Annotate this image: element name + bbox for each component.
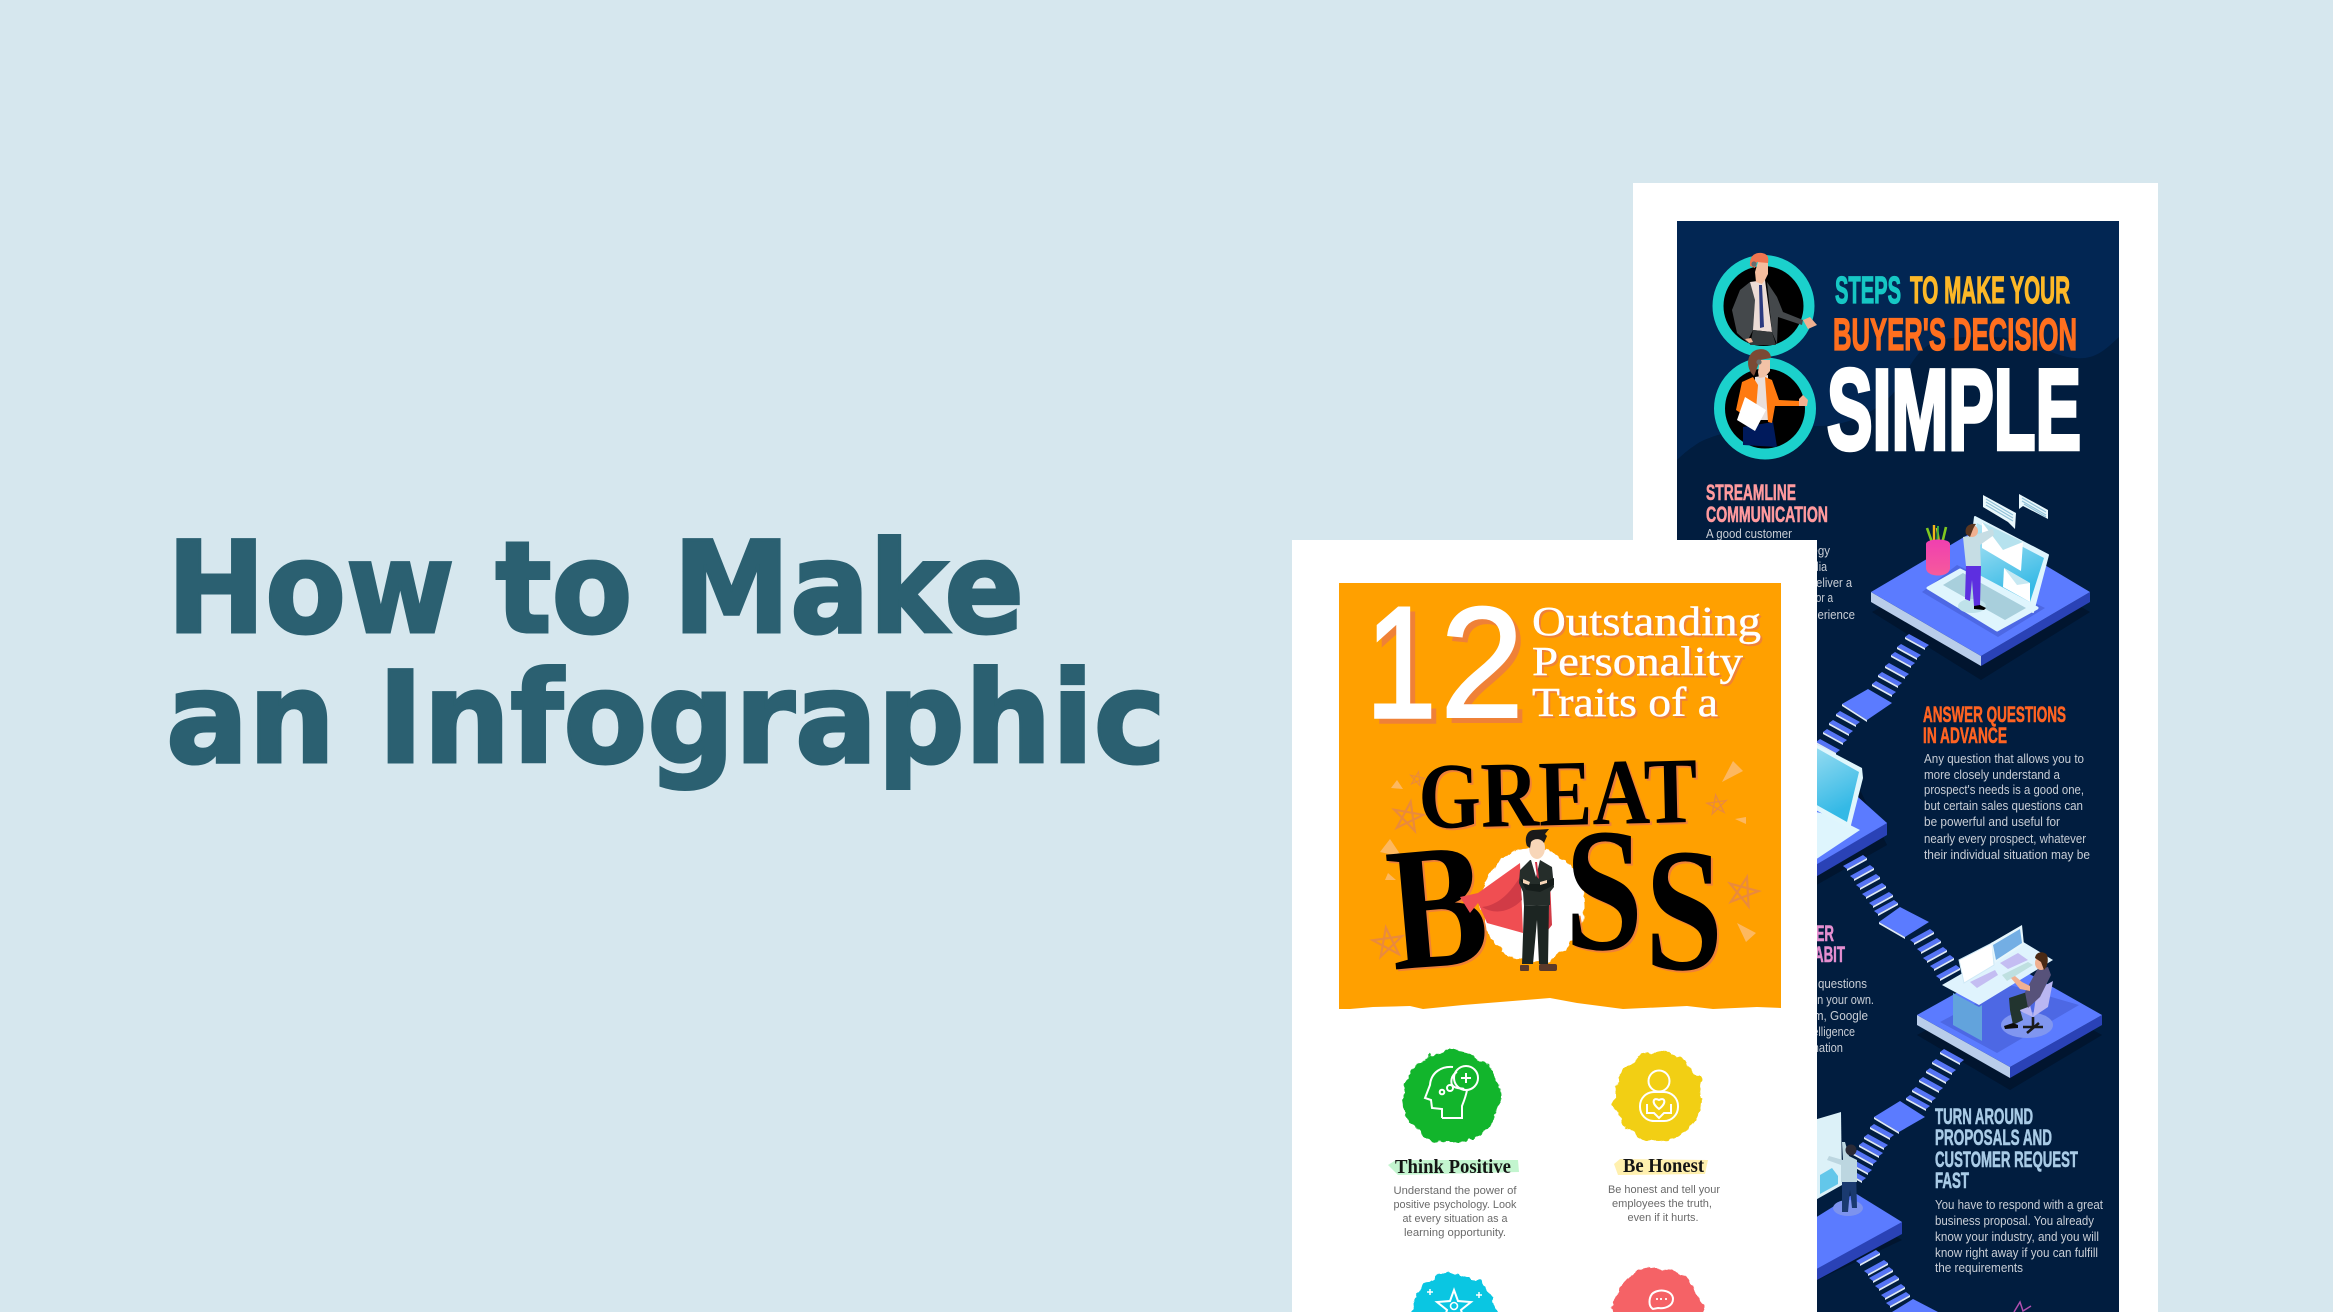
decorative stars and triangles xyxy=(1371,761,1761,957)
heading: outstanding personality traits of a: Outstanding xyxy=(1534,600,1763,646)
step 3 text: partially hidden research habit: BETTER xyxy=(1781,921,1834,946)
white torn splash behind boss xyxy=(1481,848,1585,962)
heading line: steps to make your: TO MAKE YOUR xyxy=(1910,270,2070,312)
step 4 text: turn around proposals: FAST xyxy=(1935,1168,1969,1193)
stairs: platform two to three xyxy=(1843,855,1960,981)
stairs: platform four onward xyxy=(1856,1250,1938,1312)
step 4 text: turn around proposals: TURN AROUND xyxy=(1935,1104,2033,1129)
step 2 text: answer questions in advance: prospect's needs is a good one, xyxy=(1924,783,2084,797)
icon: yellow blob with person and heart xyxy=(1614,1051,1702,1141)
step 3 text: partially hidden research habit: from, Google xyxy=(1800,1009,1868,1023)
step 2 text: answer questions in advance: but certain sales questions can xyxy=(1924,799,2083,813)
step 3 text: partially hidden research habit: RESEARCH HABIT xyxy=(1726,942,1845,967)
step 3 text: partially hidden research habit: questions xyxy=(1818,977,1867,991)
heading word: boss: S xyxy=(1645,813,1723,1008)
heading word: great: GREAT xyxy=(1419,741,1701,851)
heading: outstanding personality traits of a: Outstanding xyxy=(1532,598,1761,644)
heading word: simple: SIMPLE xyxy=(1827,347,2081,474)
step 1 text: streamline communication: A good customer xyxy=(1706,527,1792,541)
title: an Infographic xyxy=(166,644,1166,792)
step 3 text: partially hidden research habit xyxy=(1726,921,1874,1055)
icon: red blob with speech bubble xyxy=(1612,1267,1702,1312)
panel: front infographic card xyxy=(1292,540,1817,1312)
step 4 text: turn around proposals: the requirements xyxy=(1935,1261,2023,1275)
label highlight xyxy=(1614,1159,1708,1175)
trait: think positive xyxy=(1388,1051,1519,1239)
heading line: buyer's decision: BUYER'S DECISION xyxy=(1833,309,2077,360)
trait: be honest xyxy=(1608,1051,1720,1224)
step 2 text: answer questions in advance: IN ADVANCE xyxy=(1923,723,2007,748)
title xyxy=(166,514,1166,792)
heading: outstanding personality traits of a: Personality xyxy=(1534,640,1746,686)
step 3 text: partially hidden research habit: on your own. xyxy=(1811,993,1874,1007)
step 1 text: streamline communication: STREAMLINE xyxy=(1706,480,1796,505)
heading word: boss: S xyxy=(1567,795,1645,990)
step 3 text: partially hidden research habit: information xyxy=(1788,1041,1843,1055)
icon: man in teal ring xyxy=(1718,253,1817,352)
illustration: laptop platform xyxy=(1871,494,2090,680)
heading: outstanding personality traits of a xyxy=(1532,598,1763,727)
big number 12: 2 xyxy=(1445,580,1529,756)
step 4 text: turn around proposals: PROPOSALS AND xyxy=(1935,1125,2052,1150)
icon: pink doodle star at page cut xyxy=(2014,1302,2031,1312)
big number 12 xyxy=(1366,575,1529,756)
step 4 text: turn around proposals: know your industry, and you will xyxy=(1935,1230,2099,1244)
description: at every situation as a xyxy=(1402,1213,1508,1225)
description xyxy=(1394,1185,1517,1239)
description: employees the truth, xyxy=(1612,1198,1712,1210)
panel: back infographic card xyxy=(1633,183,2158,1312)
title: How to Make xyxy=(167,514,1024,662)
navy poster background xyxy=(1677,221,2119,1312)
illustration: second laptop platform xyxy=(1700,725,1887,900)
poster header with torn edge xyxy=(1339,583,1781,1009)
character: boss with red cape xyxy=(1460,829,1557,971)
step 1 text: streamline communication xyxy=(1706,480,1855,622)
heading word: great: GREAT xyxy=(1417,739,1698,849)
heading line: steps to make your xyxy=(1835,270,2070,312)
icon: green blob with head and plus xyxy=(1403,1051,1501,1143)
heading word: boss: B xyxy=(1382,808,1497,1010)
step 4 text: turn around proposals: You have to respond with a great xyxy=(1935,1198,2103,1212)
heading word: boss: B xyxy=(1380,806,1495,1008)
big number 12: 2 xyxy=(1440,575,1524,751)
description: Be honest and tell your xyxy=(1608,1184,1720,1196)
step 3 text: partially hidden research habit: intelligence xyxy=(1801,1025,1855,1039)
big number 12: 1 xyxy=(1366,575,1436,751)
step 4 text: turn around proposals: business proposal. You already xyxy=(1935,1214,2095,1228)
heading line: steps to make your: STEPS xyxy=(1835,270,1901,312)
description: Understand the power of xyxy=(1394,1185,1517,1197)
step 1 text: streamline communication: deliver a xyxy=(1810,576,1852,590)
icon: woman in teal ring xyxy=(1720,349,1810,454)
label: Be Honest xyxy=(1623,1155,1704,1177)
step 4 text: turn around proposals xyxy=(1935,1104,2103,1275)
step 1 text: streamline communication: experience xyxy=(1799,608,1855,622)
label: Think Positive xyxy=(1395,1156,1511,1178)
stairs: platform one to two xyxy=(1816,634,1929,755)
heading: outstanding personality traits of a: Traits of a xyxy=(1532,679,1718,725)
illustration: desk platform xyxy=(1917,925,2102,1090)
heading word: boss: S xyxy=(1565,793,1643,988)
stairs: platform three to four xyxy=(1842,1049,1964,1183)
step 1 text: streamline communication: media xyxy=(1798,560,1827,574)
step 2 text: answer questions in advance: be powerful and useful for xyxy=(1924,815,2060,829)
description: positive psychology. Look xyxy=(1394,1199,1517,1211)
heading: outstanding personality traits of a: Personality xyxy=(1532,638,1744,684)
description: learning opportunity. xyxy=(1404,1227,1506,1239)
step 2 text: answer questions in advance: more closely understand a xyxy=(1924,768,2060,782)
step 1 text: streamline communication: COMMUNICATION xyxy=(1706,502,1828,527)
heading word: boss xyxy=(1380,793,1725,1010)
description xyxy=(1608,1184,1720,1224)
step 2 text: answer questions in advance: nearly every prospect, whatever xyxy=(1924,832,2086,846)
heading: outstanding personality traits of a: Traits of a xyxy=(1534,681,1720,727)
step 4 text: turn around proposals: CUSTOMER REQUEST xyxy=(1935,1147,2078,1172)
step 2 text: answer questions in advance: Any question that allows you to xyxy=(1924,752,2084,766)
step 1 text: streamline communication: strategy xyxy=(1789,544,1831,558)
heading word: boss: S xyxy=(1647,815,1725,1010)
step 2 text: answer questions in advance xyxy=(1923,702,2090,862)
icon: blue blob with star xyxy=(1410,1273,1498,1312)
description: even if it hurts. xyxy=(1628,1212,1698,1224)
big number 12: 1 xyxy=(1371,580,1441,756)
step 2 text: answer questions in advance: ANSWER QUESTIONS xyxy=(1923,702,2066,727)
label highlight xyxy=(1388,1160,1519,1175)
step 1 text: streamline communication: for a xyxy=(1813,591,1833,605)
step 4 text: turn around proposals: know right away if you can fulfill xyxy=(1935,1246,2098,1260)
illustration: chart platform xyxy=(1700,1112,1902,1312)
step 2 text: answer questions in advance: their individual situation may be xyxy=(1924,848,2090,862)
